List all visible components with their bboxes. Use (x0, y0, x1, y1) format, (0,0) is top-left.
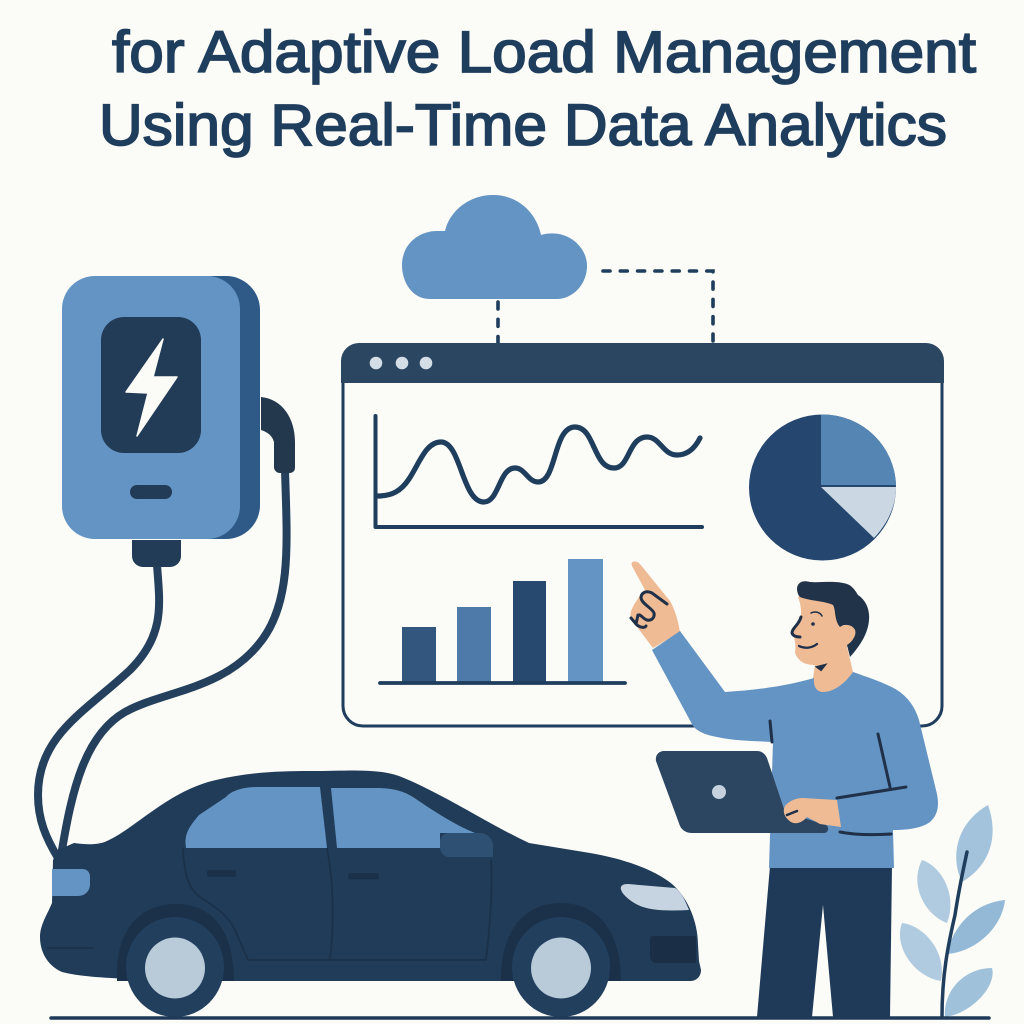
pie chart (749, 414, 896, 560)
charger front (62, 276, 240, 539)
line chart (376, 416, 702, 527)
bar chart (380, 559, 625, 683)
sweater fold lines (770, 721, 906, 835)
title: Using Real-Time Data Analytics (99, 93, 947, 158)
stem (942, 852, 967, 1017)
charging cables (38, 470, 287, 858)
pointing hand (630, 562, 680, 648)
headlight (621, 884, 689, 910)
sweater (652, 631, 938, 868)
side plug (261, 397, 295, 473)
charger side (150, 276, 260, 539)
ground line (51, 1016, 989, 1020)
taillight (52, 869, 90, 896)
wheel arches (117, 904, 234, 981)
charger screen (101, 317, 201, 453)
face details (792, 612, 825, 670)
icon: lightning bolt (126, 339, 177, 436)
plant (900, 805, 1005, 1017)
front wheel (512, 917, 610, 1017)
rear wheel (126, 917, 224, 1017)
laptop (656, 751, 828, 833)
hand finger line (787, 811, 797, 815)
dashed connectors (498, 271, 713, 343)
title: for Adaptive Load Management (112, 20, 976, 85)
door handles (207, 870, 236, 877)
mirror (440, 833, 493, 857)
leaves (900, 805, 1005, 1017)
icon: cloud (402, 195, 587, 299)
person (630, 562, 938, 1017)
panel: wall charger (62, 276, 295, 567)
front window (331, 788, 475, 848)
status pill (130, 485, 172, 499)
neck and face (793, 590, 856, 697)
lower hand (784, 798, 841, 827)
grille (650, 936, 696, 963)
hair (797, 581, 869, 657)
finger outlines (631, 592, 667, 627)
window buttons (370, 357, 432, 369)
rear window (186, 787, 327, 848)
title (99, 20, 976, 158)
door lines (47, 848, 492, 960)
panel: dashboard window (341, 343, 944, 726)
pants (757, 866, 892, 1017)
car (40, 770, 701, 1017)
bottom connector (132, 540, 181, 567)
car body (40, 770, 701, 981)
